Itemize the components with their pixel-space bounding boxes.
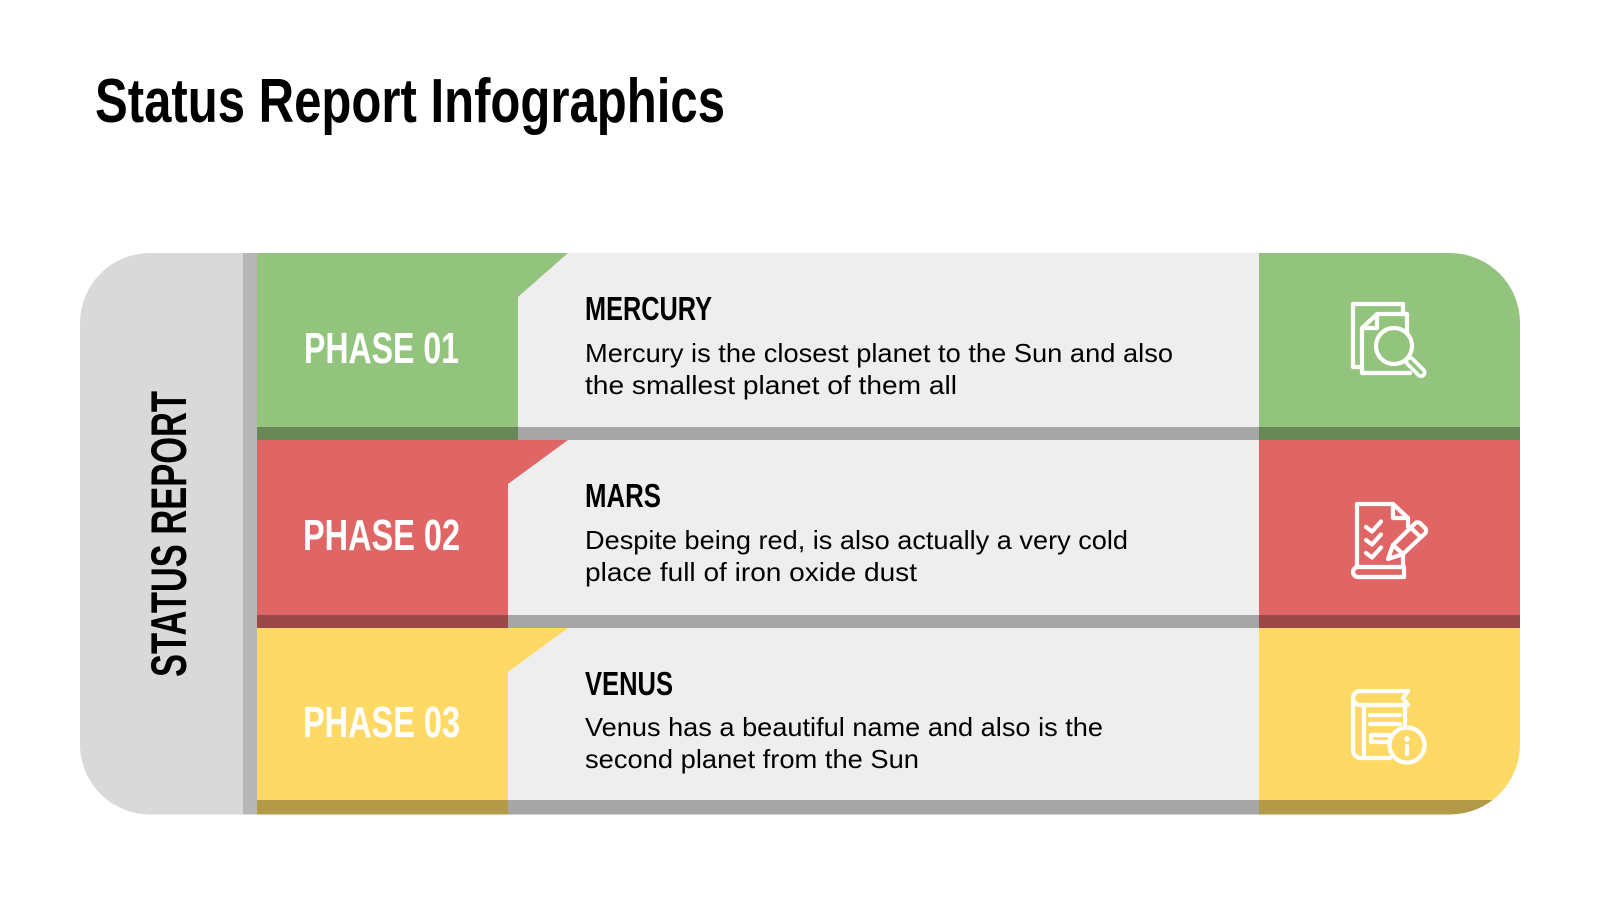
phase 01 block <box>257 253 568 427</box>
phase 02 shadow band <box>257 615 508 628</box>
phase 01 shadow band <box>257 427 518 440</box>
venus description: Venus has a beautiful name and also is the <box>585 712 1103 742</box>
panel: mars description background <box>508 440 1259 615</box>
mercury description: the smallest planet of them all <box>585 370 957 400</box>
phase 01 label: PHASE 01 <box>304 324 459 373</box>
mercury icon tile <box>1259 253 1520 427</box>
mars description <box>585 525 1128 587</box>
mercury text block <box>585 290 1173 400</box>
phase 03 block <box>257 628 568 800</box>
venus icon tile band <box>1259 800 1492 814</box>
phase 02 label: PHASE 02 <box>303 511 460 560</box>
mercury description <box>585 338 1173 400</box>
mars bottom band <box>508 615 1259 628</box>
mars icon tile <box>1259 440 1520 615</box>
venus description <box>585 712 1103 774</box>
mars description: Despite being red, is also actually a very cold <box>585 525 1128 555</box>
phase 03 shadow band <box>257 800 508 815</box>
panel: venus description background <box>508 628 1259 800</box>
venus bottom band <box>508 800 1259 814</box>
venus text block <box>585 665 1103 774</box>
venus description: second planet from the Sun <box>585 744 919 774</box>
icon: checklist with pencil <box>1353 504 1426 577</box>
mercury icon tile band <box>1259 427 1520 440</box>
panel: status report card <box>80 253 1520 815</box>
mars description: place full of iron oxide dust <box>585 557 918 587</box>
sidebar label: STATUS REPORT <box>141 391 197 677</box>
mars text block <box>585 477 1128 587</box>
title: Status Report Infographics <box>95 67 725 136</box>
venus heading: VENUS <box>585 665 673 702</box>
mars heading: MARS <box>585 477 661 514</box>
venus icon tile <box>1259 628 1520 800</box>
mercury description: Mercury is the closest planet to the Sun and also <box>585 338 1173 368</box>
sidebar divider strip <box>243 253 257 815</box>
icon: documents with magnifier <box>1353 304 1421 373</box>
mercury bottom band <box>518 427 1259 440</box>
phase 03 label: PHASE 03 <box>303 698 460 747</box>
panel: mercury description background <box>518 253 1259 427</box>
mercury heading: MERCURY <box>585 290 712 327</box>
phase 02 block <box>257 440 568 615</box>
icon: book with info badge <box>1353 691 1424 762</box>
mars icon tile band <box>1259 615 1520 628</box>
panel: sidebar <box>80 253 243 815</box>
